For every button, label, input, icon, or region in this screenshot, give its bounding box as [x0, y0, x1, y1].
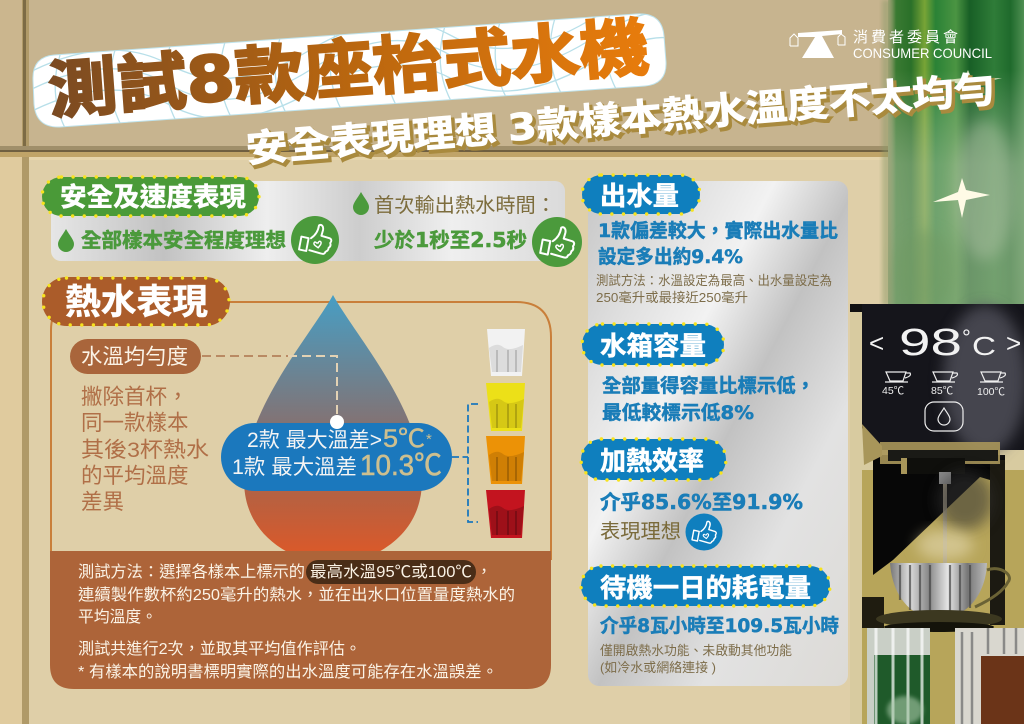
icon: thumbs up [532, 217, 582, 267]
heading: water output: 出水量 [600, 181, 679, 211]
text: description: 同一款樣本 [81, 411, 189, 435]
display: cup presets: 100℃ [977, 386, 1006, 398]
water drop [244, 295, 422, 568]
text: description: 其後3杯熱水 [81, 438, 209, 462]
bamboo backdrop with fog [882, 0, 1024, 310]
heading: safety and speed: 安全及速度表現 [60, 182, 246, 212]
display: temperature: < [869, 328, 884, 358]
text: tank capacity result [602, 374, 815, 424]
display: cup presets [882, 372, 1006, 431]
heading: standby power: 待機一日的耗電量 [600, 573, 811, 603]
display: temperature: ° [962, 325, 971, 350]
text: tank capacity result: 全部量得容量比標示低， [602, 374, 815, 397]
label: temperature uniformity [70, 339, 201, 374]
glass: yellow [486, 383, 525, 431]
heading: tank capacity: 水箱容量 [600, 331, 706, 361]
bracket [452, 404, 478, 522]
panel: safety and speed [42, 177, 582, 267]
subtitle: 安全表現理想 3款樣本熱水溫度不太均勻 [247, 71, 1000, 174]
heading: safety and speed [42, 177, 259, 216]
heading: heating efficiency: 加熱效率 [600, 446, 704, 476]
glass teacup [876, 563, 1009, 632]
glass: green drink [867, 628, 930, 724]
test method block: 測試共進行2次，並取其平均值作評估。 [78, 640, 361, 658]
test method block: 測試方法：選擇各樣本上標示的 [78, 563, 305, 581]
test method block: 平均溫度。 [78, 608, 157, 626]
title text: 測試8款座枱式水機 [46, 11, 651, 128]
panel: right column [581, 175, 848, 686]
test method block [50, 551, 551, 689]
subtitle: 安全表現理想 3款樣本熱水溫度不太均勻 [244, 68, 997, 171]
text: water output result: 設定多出約9.4% [598, 245, 743, 268]
text: first hot water time: 首次輸出熱水時間： [374, 194, 556, 217]
glass: white [487, 329, 525, 376]
panel: hot water performance [42, 277, 551, 689]
icon: drop [353, 192, 369, 215]
display: temperature: > [1006, 328, 1021, 358]
dashed connector [202, 355, 288, 357]
text: standby note: 僅開啟熱水功能、未啟動其他功能 [600, 643, 792, 658]
heading: hot water performance [42, 277, 230, 326]
callout: max temperature difference: 5℃ [383, 425, 425, 453]
callout: max temperature difference: * [426, 431, 432, 448]
photo: water dispenser [850, 304, 1024, 724]
callout: max temperature difference: 1款 最大溫差 [232, 456, 357, 479]
text: standby note [600, 643, 792, 675]
text: standby note: (如冷水或網絡連接 ) [600, 660, 716, 675]
heading: hot water performance: 熱水表現 [65, 283, 208, 322]
text: water output method [596, 273, 832, 305]
display: temperature: 98 [899, 322, 962, 364]
logo: consumer council: CONSUMER COUNCIL [853, 45, 992, 61]
text: tank capacity result: 最低較標示低8% [602, 401, 754, 424]
logo: consumer council: 消費者委員會 [853, 29, 958, 46]
text: under 1 to 2.5 seconds: 少於1秒至2.5秒 [374, 228, 527, 252]
heading: standby power [581, 566, 830, 606]
text: description: 的平均溫度 [81, 464, 189, 488]
callout: max temperature difference: 10.3℃ [360, 450, 442, 482]
text: description: 差異 [81, 490, 124, 514]
display: cup presets: 85℃ [931, 385, 954, 397]
text: standby power result: 介乎8瓦小時至109.5瓦小時 [600, 615, 839, 637]
display: cup presets: 45℃ [882, 385, 905, 397]
callout: max temperature difference [221, 415, 452, 491]
text: water output result: 1款偏差較大，實際出水量比 [598, 219, 838, 242]
heading: heating efficiency [581, 439, 726, 480]
heading: tank capacity [582, 324, 724, 365]
label: temperature uniformity: 水溫均勻度 [81, 345, 188, 369]
text: water output result [598, 219, 838, 268]
icon: drop [58, 229, 74, 252]
text: water output method: 250毫升或最接近250毫升 [596, 290, 748, 305]
heading: water output [582, 175, 700, 214]
logo: consumer council [790, 29, 992, 61]
icon: thumbs up [686, 514, 722, 550]
test method block: * 有樣本的說明書標明實際的出水溫度可能存在水溫誤差。 [78, 662, 498, 681]
glass: orange [486, 436, 525, 484]
display: temperature: C [972, 331, 996, 361]
glass: red [486, 490, 525, 538]
text: heating efficiency result: 介乎85.6%至91.9% [600, 490, 803, 514]
test method block: ， [476, 564, 492, 581]
text: description: 撇除首杯， [81, 385, 189, 409]
test method block: 最高水溫95℃或100℃ [310, 563, 472, 581]
text: ideal: 表現理想 [600, 520, 681, 543]
text: water output method: 測試方法：水溫設定為最高、出水量設定為 [596, 273, 832, 288]
icon: thumbs up [291, 216, 339, 264]
test method block: 連續製作數杯約250毫升的熱水，並在出水口位置量度熱水的 [78, 585, 515, 604]
glass: brown drink [955, 628, 1024, 724]
text: description [81, 385, 209, 514]
text: all samples safe: 全部樣本安全程度理想 [81, 228, 286, 252]
title banner [32, 13, 666, 128]
display: temperature [869, 322, 1021, 364]
callout: max temperature difference: 2款 最大溫差> [247, 429, 382, 452]
